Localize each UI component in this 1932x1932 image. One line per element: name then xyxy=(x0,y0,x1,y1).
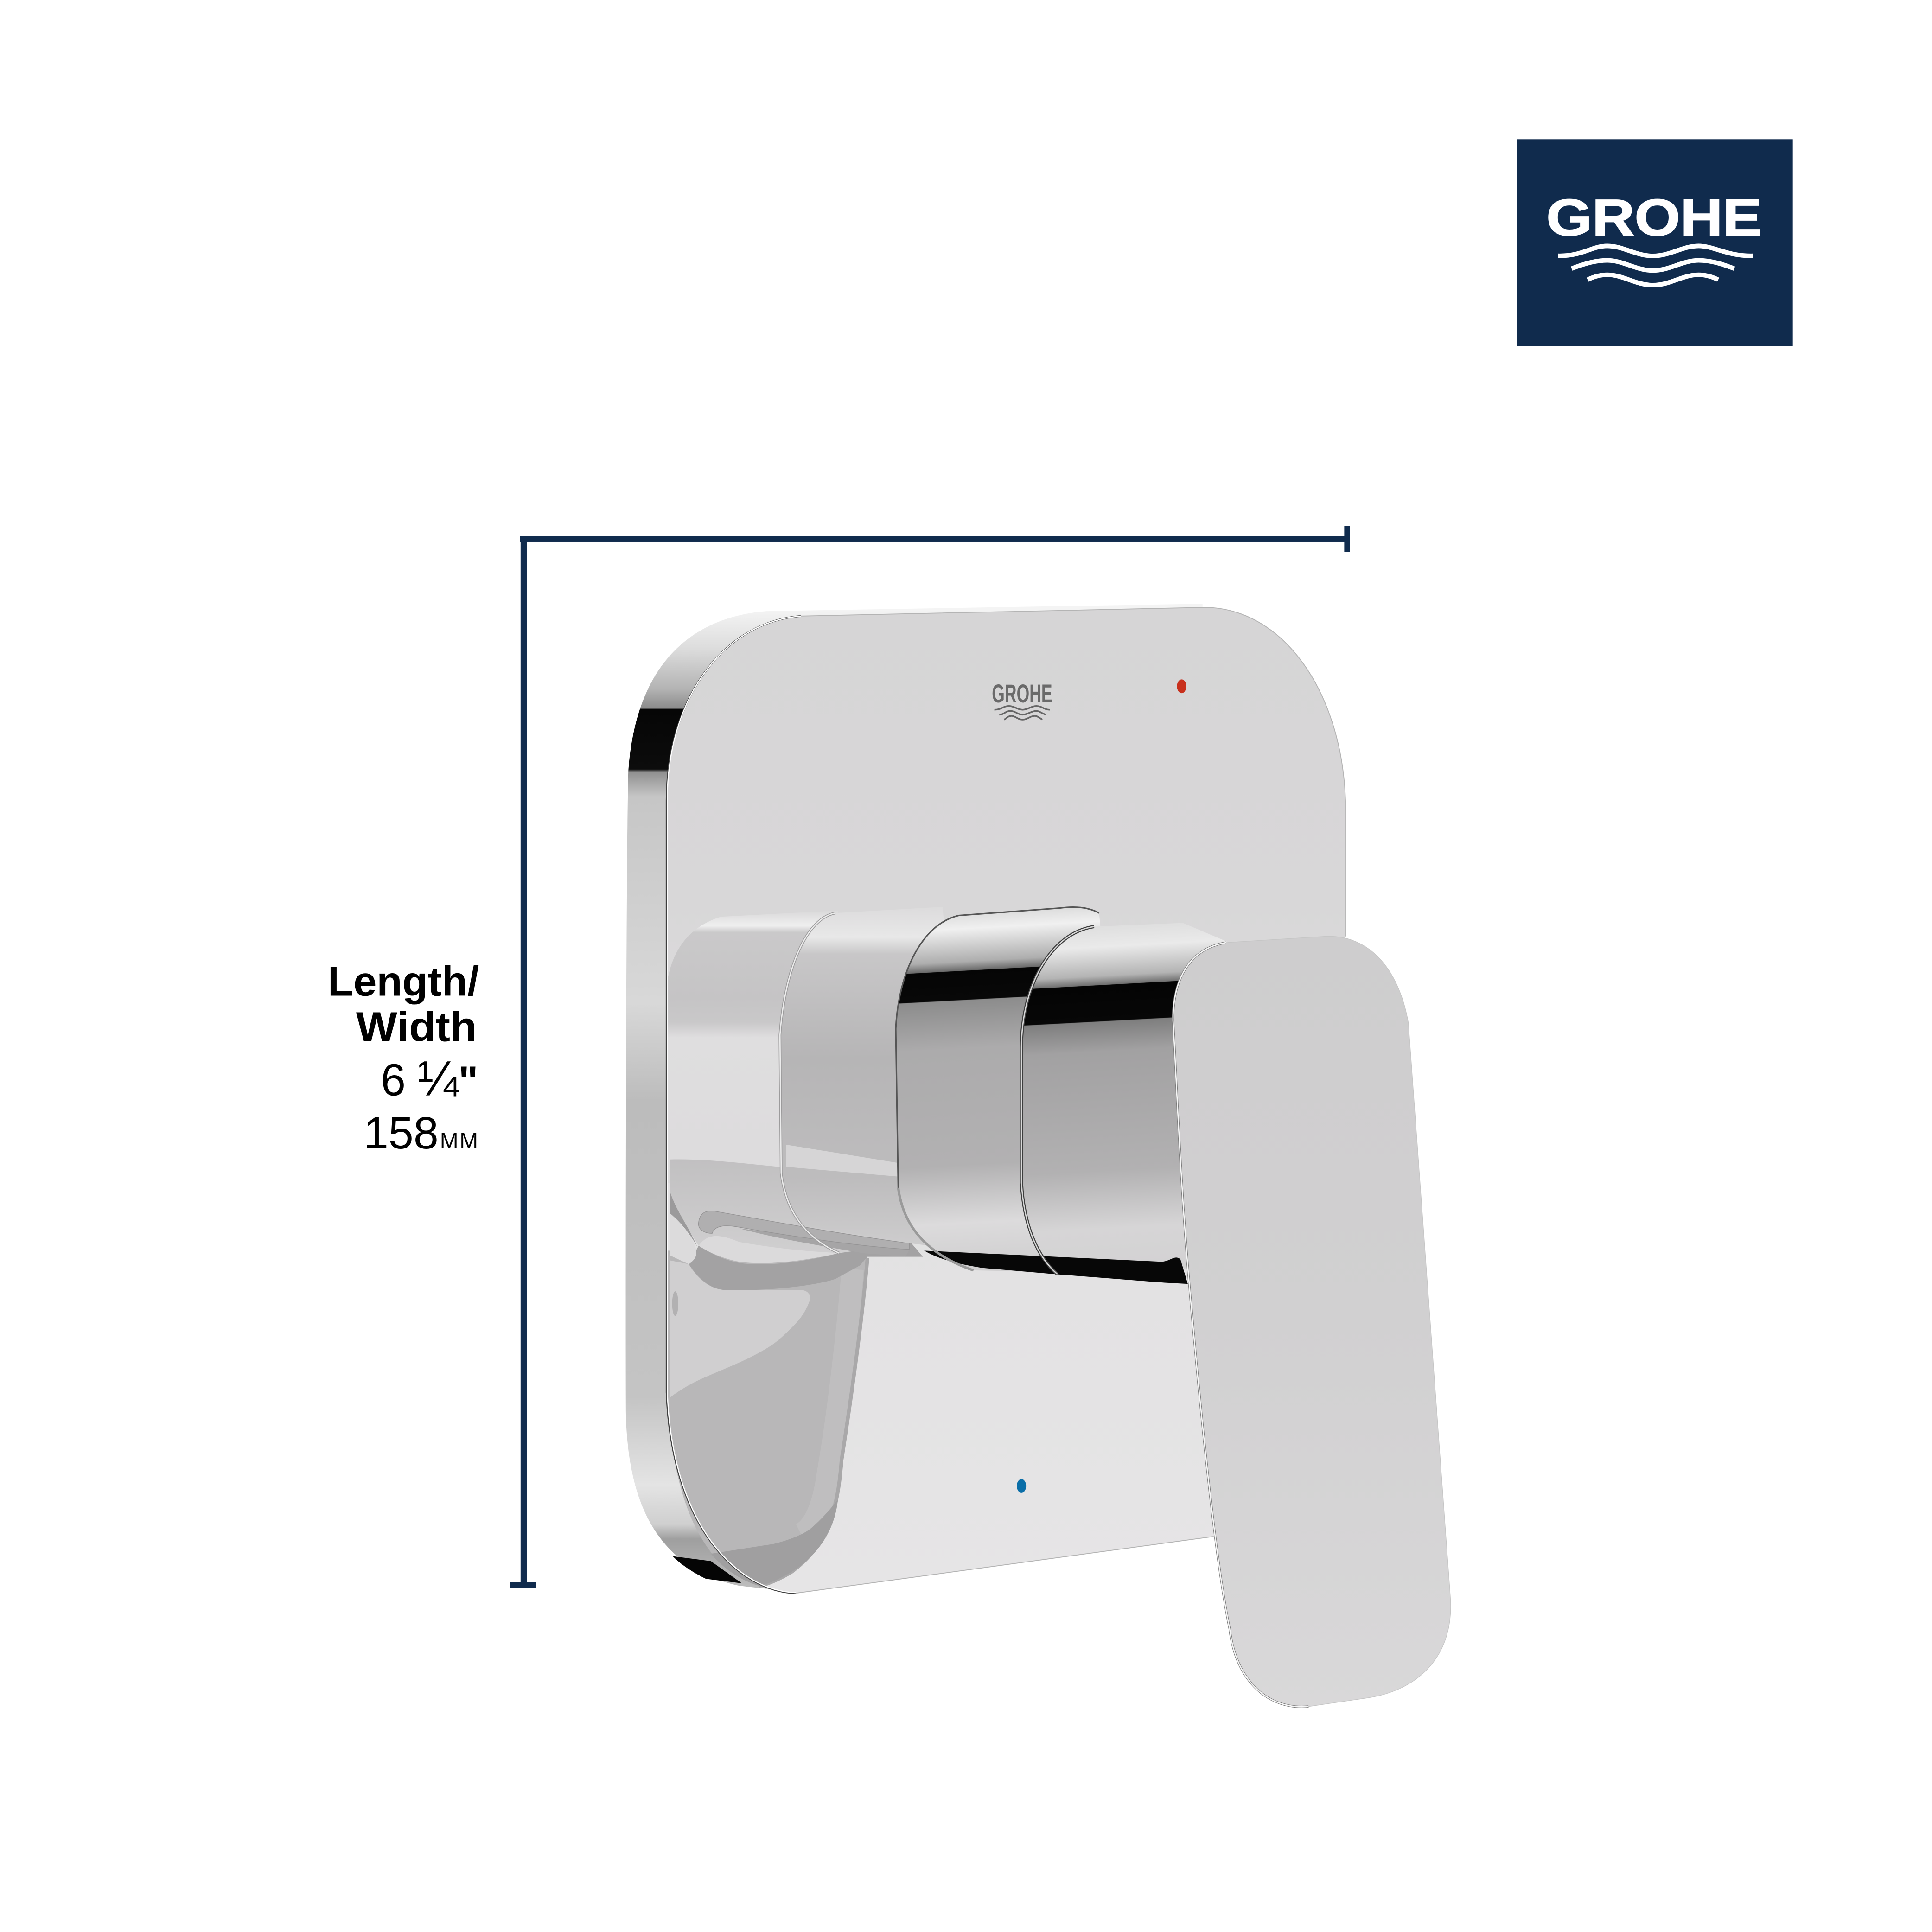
body section B chrome rim xyxy=(780,913,839,1253)
plate logo mark: GROHE xyxy=(992,679,1052,708)
lever chrome rim xyxy=(1173,943,1308,1707)
body section B xyxy=(780,907,973,1250)
body section B highlight xyxy=(786,1145,899,1177)
dark strip under handle xyxy=(924,1250,1188,1284)
body section C xyxy=(896,907,1134,1274)
label heading: Length/ xyxy=(328,958,479,1005)
body section A xyxy=(667,911,862,1183)
lever handle xyxy=(1173,936,1451,1707)
plate logo mark xyxy=(992,679,1052,720)
lower reflection on plate xyxy=(668,1241,923,1586)
body section D xyxy=(1021,923,1232,1274)
logo: GROHE badge xyxy=(1517,139,1793,346)
metric value: MM xyxy=(440,1129,479,1154)
inch value: 6 xyxy=(381,1055,406,1105)
metric value: 158 xyxy=(363,1108,439,1158)
body section C rim xyxy=(896,907,1099,1270)
dimension bracket xyxy=(510,526,1350,1588)
black reflection on lower edge xyxy=(673,1556,742,1583)
label heading second line: Width xyxy=(356,1004,477,1051)
plate left rim xyxy=(667,616,801,1593)
inch value: ¼ xyxy=(418,1051,459,1106)
plate front face xyxy=(667,607,1345,1593)
logo waves xyxy=(1558,246,1753,285)
plate side edge xyxy=(626,604,1203,1592)
plate bottom and top outlines xyxy=(796,607,1345,1593)
cold indicator dot xyxy=(1017,1479,1026,1493)
body section D rim xyxy=(898,926,1094,1274)
hot indicator dot xyxy=(1177,679,1186,693)
inch value: " xyxy=(459,1058,478,1105)
body section A lower shadow xyxy=(670,1160,909,1264)
dimension label xyxy=(328,958,479,1158)
faucet trim plate and handle xyxy=(626,604,1451,1707)
logo wordmark: GROHE xyxy=(1546,189,1762,247)
